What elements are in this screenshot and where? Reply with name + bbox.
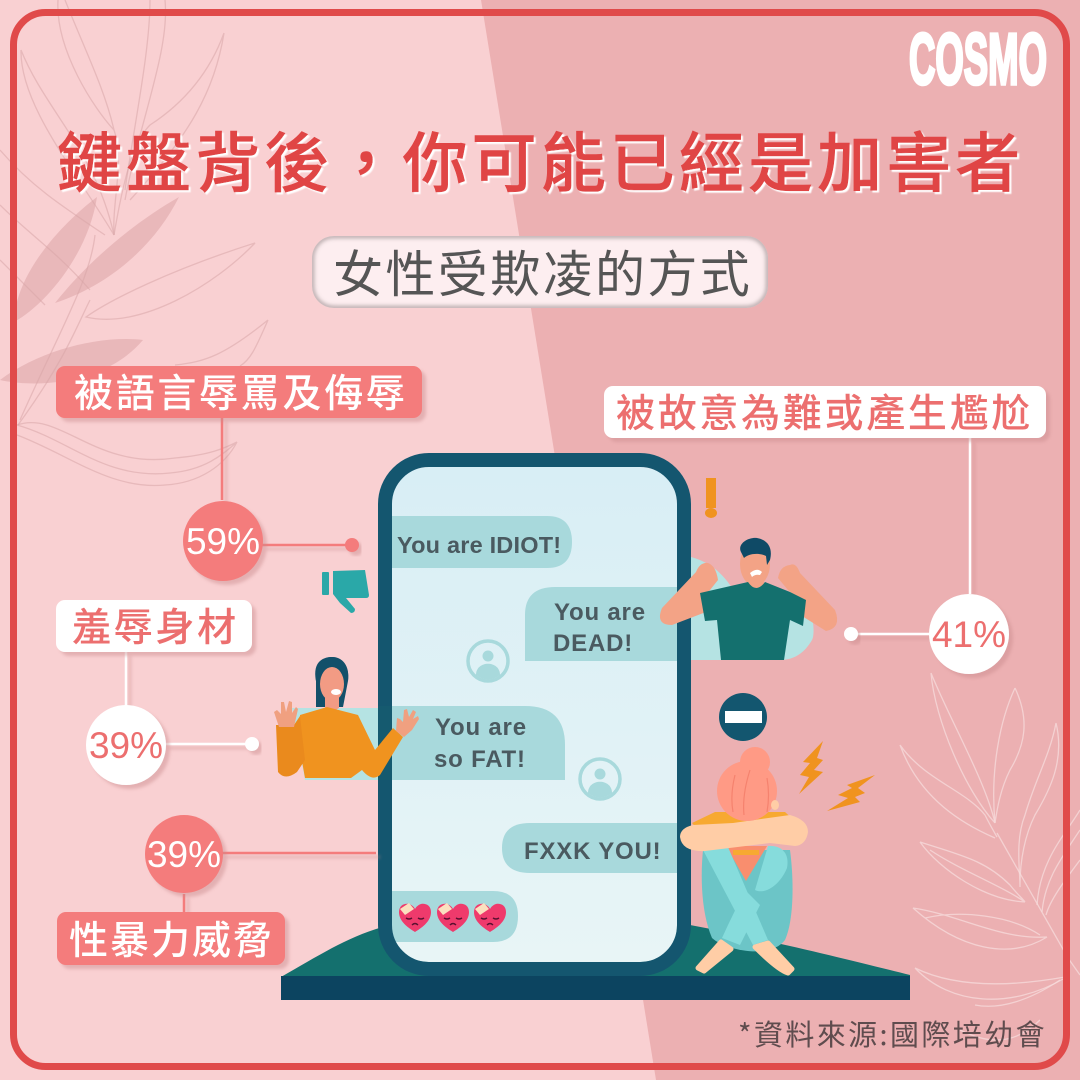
user icon bbox=[468, 641, 508, 681]
chat bubble: broken hearts bbox=[392, 891, 518, 942]
label: 被故意為難或產生尷尬 41%: 被故意為難或產生尷尬 bbox=[616, 383, 1033, 439]
source note: *資料來源:國際培幼會 bbox=[738, 1012, 1047, 1054]
chat bubble: You are so FAT: You are bbox=[435, 714, 527, 741]
label: 性暴力威脅 39%: 性暴力威脅 bbox=[69, 910, 274, 966]
label: 性暴力威脅 39%: 39% bbox=[147, 834, 221, 875]
character: woman in orange bbox=[274, 657, 419, 780]
chat bubble: You are IDIOT: You are IDIOT! bbox=[397, 532, 561, 558]
phone frame bbox=[385, 460, 684, 969]
icon: heart bbox=[437, 903, 469, 932]
label: 羞辱身材 39% bbox=[56, 597, 259, 785]
phone bbox=[385, 460, 684, 969]
icon: exclamation mark bbox=[705, 478, 717, 518]
user icon bbox=[580, 759, 620, 799]
decorative leaves: bottom right bbox=[900, 673, 1080, 1040]
label: 被故意為難或產生尷尬 41% bbox=[604, 383, 1046, 674]
chat bubble: FXXK YOU: FXXK YOU! bbox=[524, 838, 661, 865]
ground base bbox=[281, 925, 910, 1000]
label: 羞辱身材 39%: 39% bbox=[89, 725, 163, 766]
decorative leaves: top left bbox=[0, 0, 268, 485]
icon: heart bbox=[474, 903, 506, 932]
chat bubble: You are DEAD: DEAD! bbox=[553, 630, 633, 657]
label: 被故意為難或產生尷尬 41%: 41% bbox=[932, 614, 1006, 655]
chat bubble: You are so FAT: so FAT! bbox=[434, 746, 526, 773]
title: 鍵盤背後，你可能已經是加害者 bbox=[57, 111, 1024, 205]
chat bubble: You are so FAT bbox=[392, 706, 565, 780]
label: 被語言辱罵及侮辱 59%: 被語言辱罵及侮辱 bbox=[74, 363, 408, 419]
icon: lightning bolts bbox=[799, 741, 875, 811]
subtitle pill: 女性受欺凌的方式 bbox=[333, 235, 752, 307]
label: 羞辱身材 39%: 羞辱身材 bbox=[72, 597, 239, 653]
label: 被語言辱罵及侮辱 59%: 59% bbox=[186, 521, 260, 562]
chat bubble: You are DEAD: You are bbox=[554, 599, 646, 626]
character: angry man bbox=[660, 538, 837, 660]
icon: heart bbox=[399, 903, 431, 932]
chat bubble: You are DEAD bbox=[525, 587, 677, 661]
icon: no entry sign bbox=[719, 693, 767, 741]
chat bubble: FXXK YOU bbox=[502, 823, 677, 873]
phone screen bbox=[392, 467, 677, 962]
icon: thumbs down bbox=[322, 570, 369, 613]
label: 性暴力威脅 39% bbox=[57, 815, 376, 966]
chat bubble: You are IDIOT bbox=[392, 516, 572, 568]
character: sad girl hugging knees bbox=[680, 747, 808, 973]
label: 被語言辱罵及侮辱 59% bbox=[56, 363, 422, 581]
